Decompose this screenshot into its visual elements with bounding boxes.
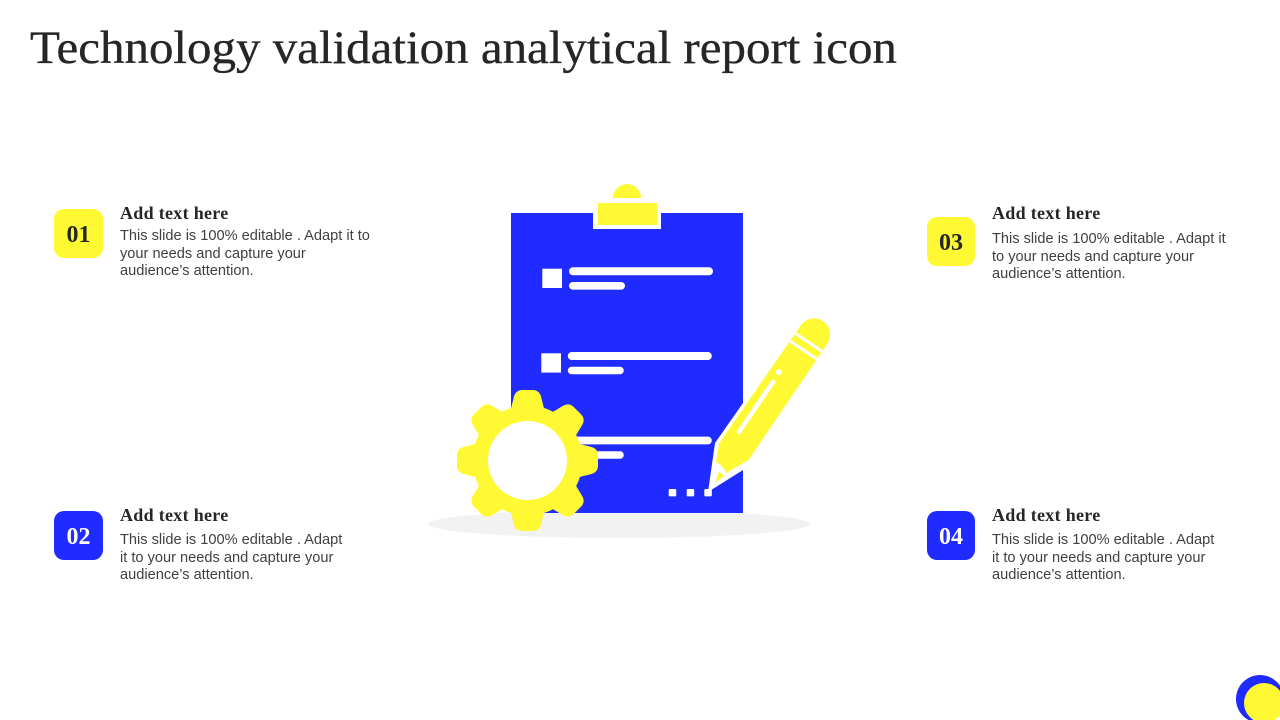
heading 02: Add text here	[120, 505, 229, 525]
text 04: This slide is 100% editable . Adapt	[992, 532, 1214, 548]
checklist row 1	[542, 267, 713, 290]
shadow	[428, 510, 810, 538]
clipboard board	[511, 213, 743, 513]
text 01: This slide is 100% editable . Adapt it to	[120, 228, 370, 244]
item 02	[54, 505, 342, 583]
text 02: This slide is 100% editable . Adapt	[120, 532, 342, 548]
text 01	[120, 228, 370, 279]
badge 04: 04	[939, 524, 963, 550]
heading 04: Add text here	[992, 505, 1101, 525]
item 04	[927, 505, 1214, 583]
text 02	[120, 532, 342, 583]
central illustration	[428, 184, 830, 538]
text 01: your needs and capture your	[120, 246, 306, 262]
badge 03	[927, 217, 975, 266]
text 03: to your needs and capture your	[992, 248, 1194, 264]
checklist row 3	[568, 437, 712, 459]
badge 04	[927, 511, 975, 560]
text 04: audience’s attention.	[992, 567, 1126, 583]
badge 02: 02	[66, 524, 90, 550]
text 04	[992, 532, 1214, 583]
title: Technology validation analytical report icon	[30, 22, 897, 74]
text 04: it to your needs and capture your	[992, 550, 1205, 566]
text 03: This slide is 100% editable . Adapt it	[992, 231, 1226, 247]
text 03	[992, 231, 1226, 282]
item 01	[54, 203, 370, 279]
signature dots	[669, 489, 712, 496]
badge 03: 03	[939, 230, 963, 256]
badge 01: 01	[66, 222, 90, 248]
corner decoration	[1236, 675, 1280, 720]
checklist row 2	[541, 352, 712, 374]
badge 02	[54, 511, 103, 560]
text 01: audience’s attention.	[120, 263, 254, 279]
text 03: audience’s attention.	[992, 266, 1126, 282]
icon: gear	[457, 390, 598, 531]
clipboard clip	[593, 184, 661, 229]
item 03	[927, 203, 1226, 282]
badge 01	[54, 209, 103, 258]
icon: pencil	[708, 318, 830, 492]
text 02: it to your needs and capture your	[120, 550, 333, 566]
text 02: audience’s attention.	[120, 567, 254, 583]
heading 03: Add text here	[992, 203, 1101, 223]
heading 01: Add text here	[120, 203, 229, 223]
